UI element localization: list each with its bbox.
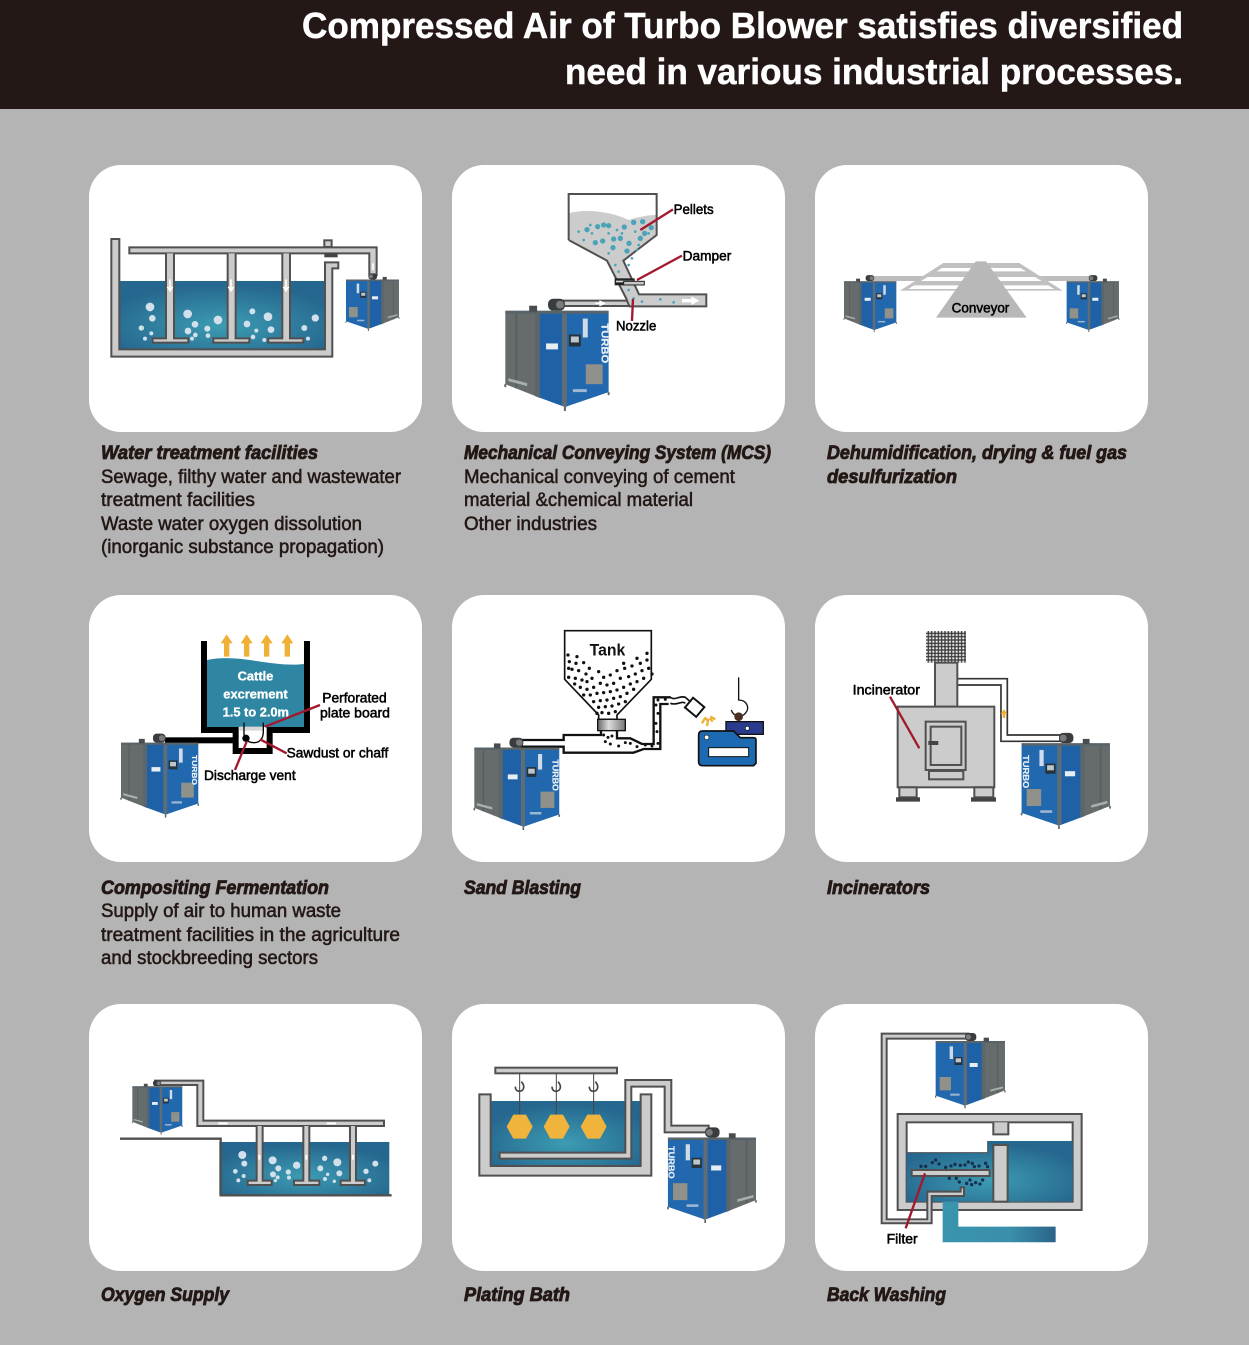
diagram: aeration tank with blower bbox=[111, 239, 399, 357]
diagram: hopper and conveying pipe: Pellets bbox=[674, 201, 714, 217]
diagram: composting tank: Cattle bbox=[238, 670, 273, 684]
header banner bbox=[0, 0, 1249, 109]
caption: Sand Blasting bbox=[464, 878, 581, 899]
caption: treatment facilities in the agriculture bbox=[101, 924, 400, 946]
panel: dehumidification, drying and desulfurization bbox=[815, 165, 1148, 488]
diagram: hopper and conveying pipe: Nozzle bbox=[616, 318, 657, 334]
diagram: incinerator: Incinerator bbox=[853, 681, 920, 697]
diagram: sand tank, pipe and blast nozzle bbox=[474, 631, 763, 830]
caption: Mechanical Conveying System (MCS) bbox=[464, 443, 771, 464]
diagram: hopper and conveying pipe: TURBO bbox=[598, 323, 609, 364]
diagram: plating bath bbox=[479, 1068, 756, 1223]
panel: water treatment facilities bbox=[89, 165, 422, 558]
caption bbox=[101, 443, 401, 558]
caption: Incinerators bbox=[827, 878, 930, 899]
caption: (inorganic substance propagation) bbox=[101, 536, 384, 558]
diagram: composting tank: excrement bbox=[223, 687, 288, 701]
caption: Back Washing bbox=[827, 1285, 946, 1306]
caption: treatment facilities bbox=[101, 489, 255, 511]
diagram: hopper and conveying pipe bbox=[505, 194, 732, 411]
header banner: Compressed Air of Turbo Blower satisfies diversified bbox=[302, 5, 1183, 46]
diagram: plating bath: TURBO bbox=[667, 1146, 677, 1179]
panel: compositing fermentation bbox=[89, 595, 422, 969]
caption: material &chemical material bbox=[464, 489, 693, 511]
diagram: composting tank: 1.5 to 2.0m bbox=[223, 706, 289, 720]
diagram: incinerator bbox=[853, 631, 1110, 829]
caption: Mechanical conveying of cement bbox=[464, 466, 736, 488]
card bbox=[89, 595, 422, 862]
caption: Plating Bath bbox=[464, 1285, 570, 1306]
diagram: back washing filter: Filter bbox=[887, 1230, 918, 1246]
panel: back washing bbox=[815, 1004, 1148, 1306]
caption: Other industries bbox=[464, 513, 597, 535]
panel: oxygen supply bbox=[89, 1004, 422, 1306]
caption: Sewage, filthy water and wastewater bbox=[101, 466, 401, 488]
diagram: hopper and conveying pipe: Damper bbox=[683, 247, 732, 263]
caption: Supply of air to human waste bbox=[101, 900, 341, 922]
caption: and stockbreeding sectors bbox=[101, 947, 318, 969]
card bbox=[815, 1004, 1148, 1271]
diagram: oxygen supply tank bbox=[120, 1080, 392, 1195]
card bbox=[452, 1004, 785, 1271]
diagram: conveyor with two blowers bbox=[844, 261, 1119, 332]
card bbox=[89, 1004, 422, 1271]
caption: Waste water oxygen dissolution bbox=[101, 513, 362, 535]
diagram: back washing filter bbox=[882, 1033, 1082, 1246]
card bbox=[452, 165, 785, 432]
card bbox=[89, 165, 422, 432]
card bbox=[815, 595, 1148, 862]
caption: Oxygen Supply bbox=[101, 1285, 230, 1306]
diagram: composting tank: plate board bbox=[320, 704, 390, 720]
diagram: composting tank bbox=[121, 634, 390, 818]
diagram: sand tank, pipe and blast nozzle: TURBO bbox=[550, 759, 560, 791]
caption: Water treatment facilities bbox=[101, 443, 318, 464]
diagram: composting tank: Sawdust or chaff bbox=[287, 744, 388, 760]
panel: mechanical conveying system bbox=[452, 165, 785, 535]
caption bbox=[464, 443, 771, 535]
caption bbox=[101, 878, 400, 969]
panel: incinerators bbox=[815, 595, 1148, 899]
card bbox=[452, 595, 785, 862]
diagram: composting tank: TURBO bbox=[190, 755, 199, 785]
diagram: composting tank: Perforated bbox=[322, 689, 387, 705]
caption: Dehumidification, drying & fuel gas bbox=[827, 443, 1127, 464]
caption bbox=[827, 443, 1127, 488]
diagram: sand tank, pipe and blast nozzle: Tank bbox=[590, 641, 626, 660]
diagram: conveyor with two blowers: Conveyor bbox=[952, 299, 1010, 315]
panel: sand blasting bbox=[452, 595, 785, 899]
caption: Compositing Fermentation bbox=[101, 878, 329, 899]
card bbox=[815, 165, 1148, 432]
header banner: need in various industrial processes. bbox=[565, 51, 1183, 92]
diagram: incinerator: TURBO bbox=[1021, 755, 1031, 789]
panel: plating bath bbox=[452, 1004, 785, 1306]
diagram: composting tank: Discharge vent bbox=[204, 767, 296, 783]
caption: desulfurization bbox=[827, 467, 957, 488]
